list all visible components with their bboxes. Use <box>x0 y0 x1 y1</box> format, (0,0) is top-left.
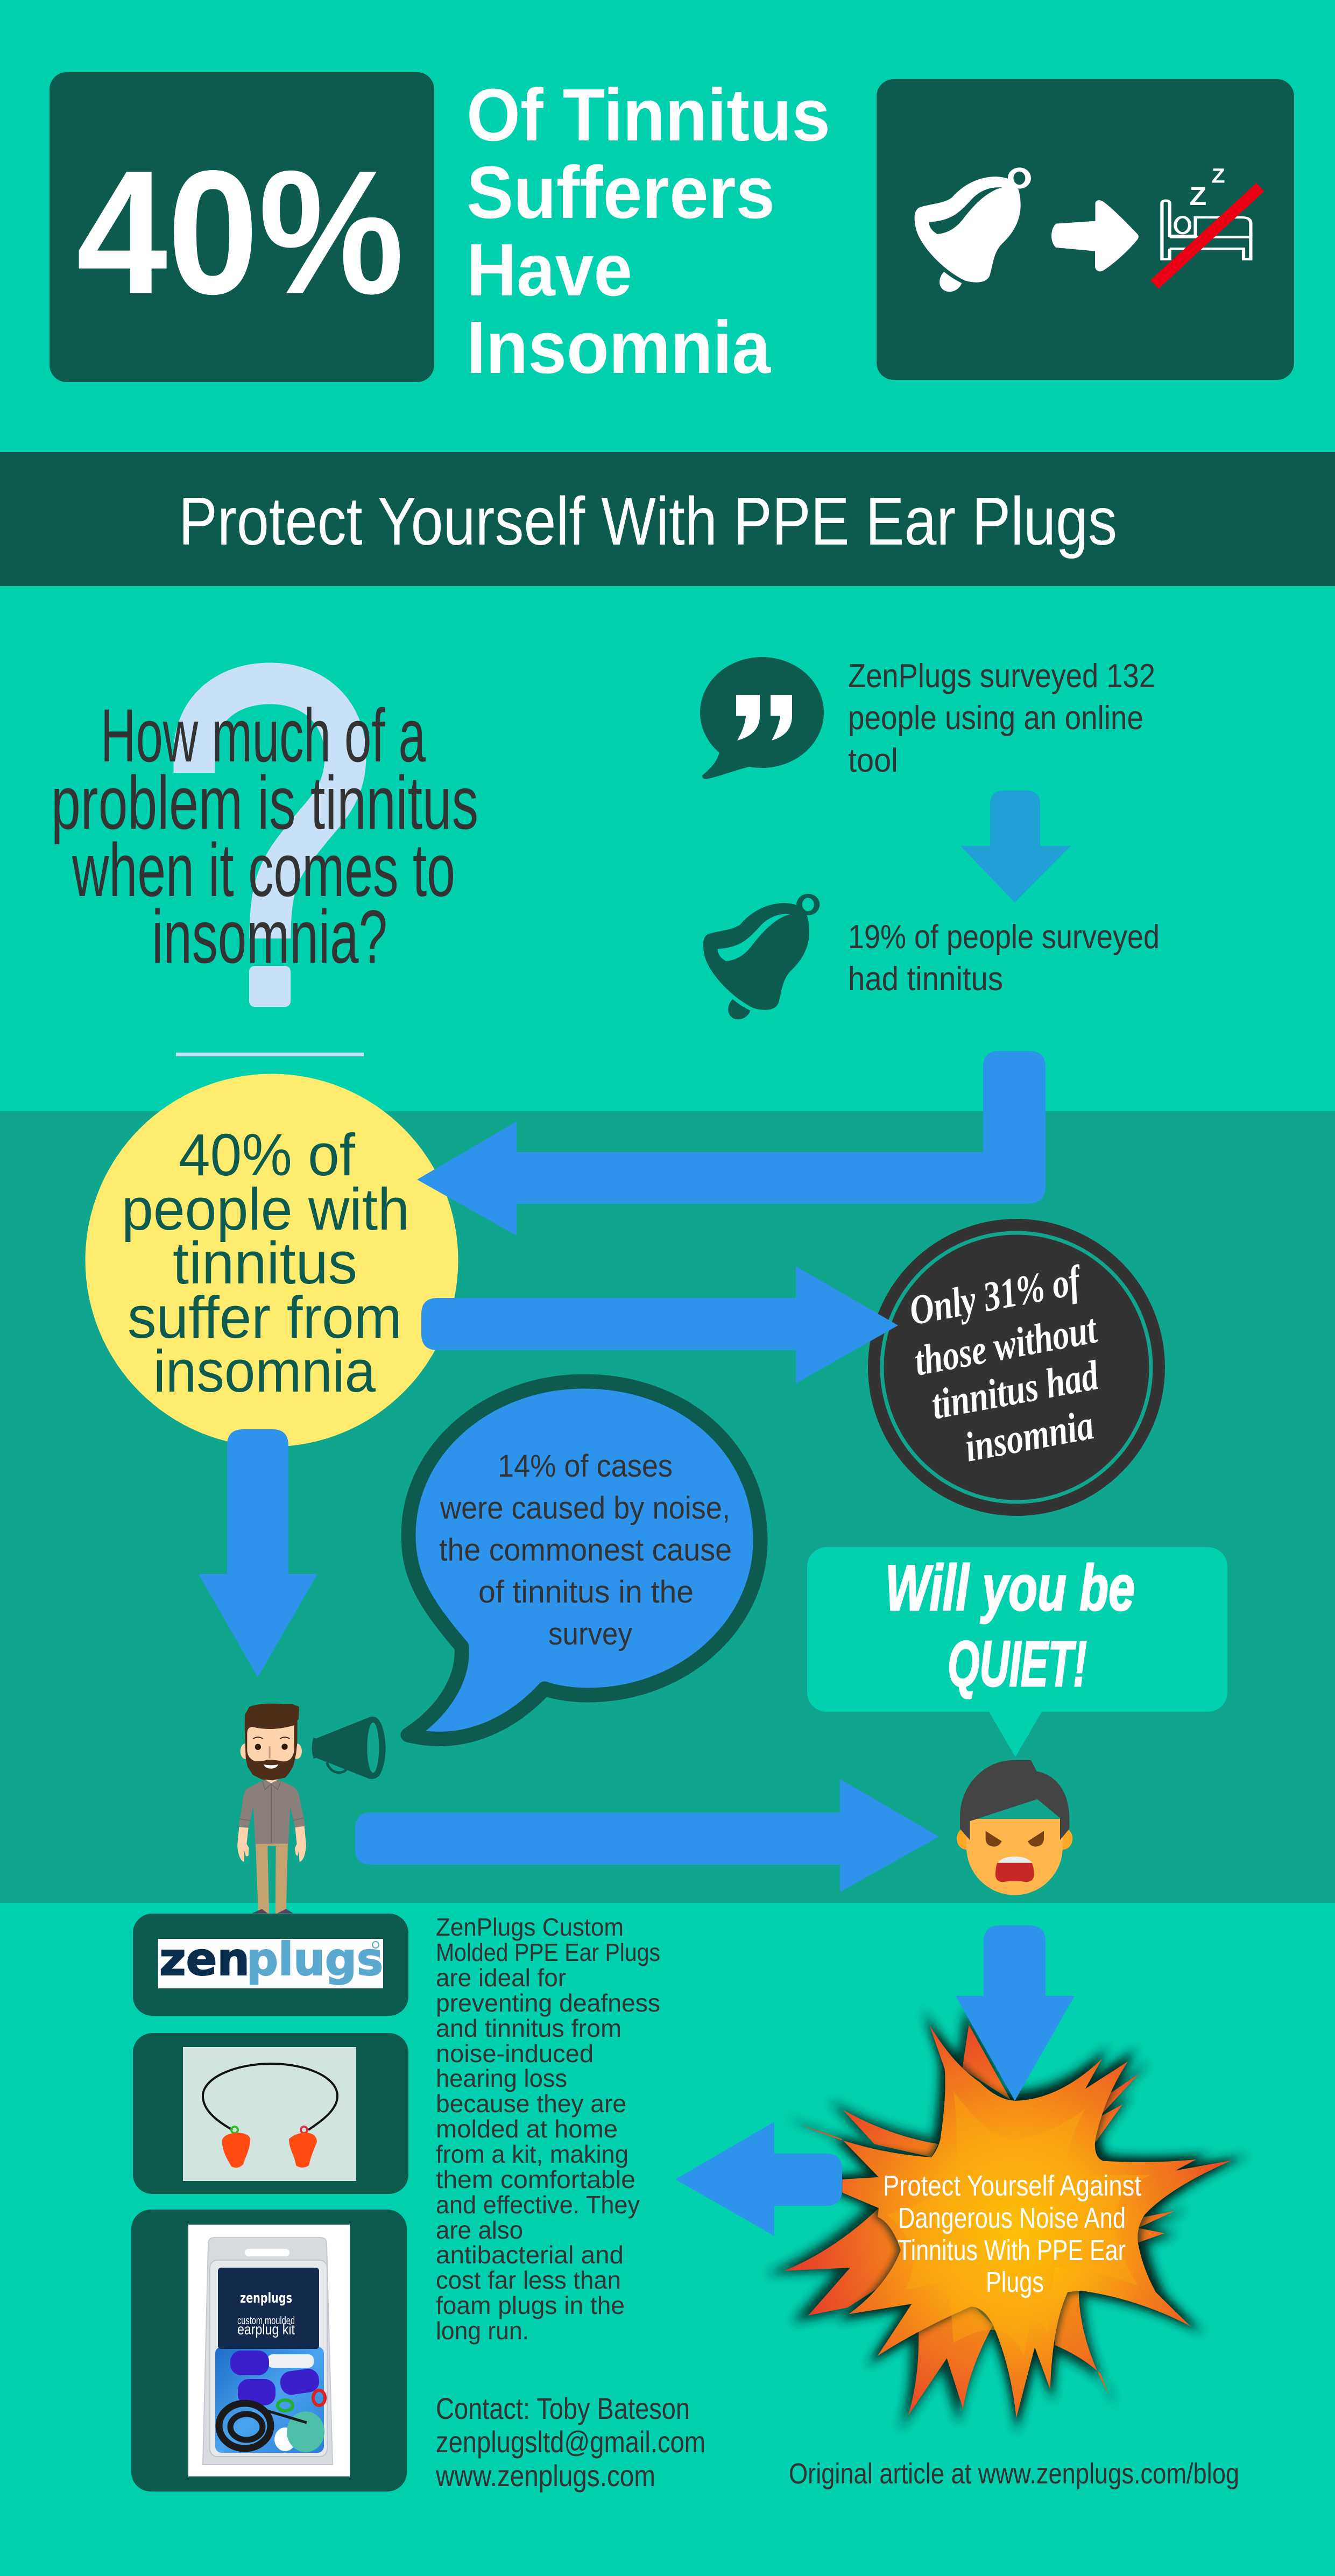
text: protect yourself against noise: Plugs <box>986 2266 1044 2298</box>
text: product description <box>436 1913 660 2345</box>
text: 19% had tinnitus <box>848 919 1160 998</box>
text: product description: hearing loss <box>436 2064 567 2092</box>
callout: yellow 40% circle: insomnia <box>153 1338 376 1405</box>
text: contact details: www.zenplugs.com <box>435 2459 655 2493</box>
arrow: man to angry neighbour <box>355 1779 939 1892</box>
icon: ringing bell <box>915 170 1028 292</box>
text: product description: them comfortable <box>436 2165 635 2193</box>
callout: noise speech bubble: survey <box>548 1617 632 1652</box>
panel: corded ear plugs photo <box>133 2033 408 2194</box>
panel: earplug kit photo: zenplugs <box>240 2290 292 2306</box>
heading: how much of a problem: problem is tinnitus <box>51 760 478 845</box>
callout: dark 31% circle: insomnia <box>961 1401 1097 1471</box>
callout: will you be quiet: QUIET! <box>948 1628 1087 1700</box>
title: of tinnitus sufferers have insomnia: Have <box>467 229 632 312</box>
arrow: yellow circle down to man <box>199 1429 317 1677</box>
arrow: survey down to result <box>960 791 1071 902</box>
panel: 40% statistic <box>50 72 434 382</box>
text: contact details: zenplugsltd@gmail.com <box>436 2425 705 2459</box>
text: 19% had tinnitus: had tinnitus <box>848 961 1003 998</box>
text: product description: foam plugs in the <box>436 2291 625 2319</box>
text: product description: are ideal for <box>436 1964 566 1992</box>
callout: noise speech bubble <box>408 1381 760 1739</box>
text: protect yourself against noise: Dangerous Noise And <box>898 2202 1126 2234</box>
panel: earplug kit photo: custom moulded <box>237 2315 295 2327</box>
text: zenplugs surveyed: ZenPlugs surveyed 132 <box>848 658 1155 695</box>
icon: dark bell <box>703 896 817 1019</box>
heading: how much of a problem <box>51 693 478 979</box>
illustration: bearded man <box>237 1704 306 1914</box>
callout: dark 31% circle: Only 31% of <box>906 1256 1086 1334</box>
icon: crossed out bed: Z <box>1212 165 1225 188</box>
divider line <box>176 1053 364 1056</box>
heading: how much of a problem: insomnia? <box>152 894 387 979</box>
callout: will you be quiet: Will you be <box>885 1552 1135 1624</box>
panel: zenplugs logo <box>133 1914 408 2016</box>
icon: megaphone <box>312 1717 386 1779</box>
heading: how much of a problem: How much of a <box>101 693 426 778</box>
text: product description: antibacterial and <box>436 2241 624 2269</box>
panel: earplug kit photo: earplug kit <box>237 2321 295 2338</box>
text: original article link: Original article at www.zenplugs.com/blog <box>789 2458 1239 2490</box>
text: zenplugs surveyed: tool <box>848 742 898 779</box>
callout: yellow 40% circle: people with <box>122 1176 409 1243</box>
text: protect yourself against noise: Protect Yourself Against <box>883 2170 1141 2202</box>
callout: yellow 40% circle <box>85 1074 458 1446</box>
callout: will you be quiet <box>807 1547 1227 1757</box>
text: product description: from a kit, making <box>436 2140 628 2168</box>
callout: yellow 40% circle: tinnitus <box>173 1230 357 1296</box>
text: product description: ZenPlugs Custom <box>436 1913 624 1941</box>
callout: noise speech bubble: were caused by noise, <box>440 1491 730 1526</box>
callout: noise speech bubble: 14% of cases <box>498 1449 673 1484</box>
text: product description: cost far less than <box>436 2266 621 2294</box>
heading: how much of a problem: when it comes to <box>72 828 455 912</box>
callout: yellow 40% circle: suffer from <box>128 1285 402 1351</box>
text: contact details: Contact: Toby Bateson <box>436 2391 690 2425</box>
callout: dark 31% circle: those without <box>910 1305 1101 1385</box>
text: product description: noise-induced <box>436 2039 594 2067</box>
banner: protect yourself: Protect Yourself With PPE Ear Plugs <box>179 483 1117 559</box>
arrow: yellow circle to dark circle <box>421 1266 898 1384</box>
callout: dark 31% circle: tinnitus had <box>928 1351 1103 1428</box>
icon: crossed out bed: Z <box>1190 181 1206 210</box>
middle band background <box>0 1111 1335 1903</box>
title: of tinnitus sufferers have insomnia: Insomnia <box>467 306 771 389</box>
callout: yellow 40% circle: 40% of <box>179 1122 355 1188</box>
icon: large question mark <box>194 683 345 1007</box>
text: zenplugs surveyed: people using an online <box>848 700 1143 737</box>
text: contact details <box>435 2391 705 2493</box>
text: product description: are also <box>436 2216 523 2244</box>
icon: white arrow <box>1051 200 1139 271</box>
text: 19% had tinnitus: 19% of people surveyed <box>848 919 1160 956</box>
text: protect yourself against noise: Tinnitus With PPE Ear <box>898 2234 1126 2267</box>
title: of tinnitus sufferers have insomnia: Sufferers <box>467 151 775 234</box>
callout: noise speech bubble: the commonest cause <box>439 1533 732 1568</box>
text: product description: long run. <box>436 2317 529 2345</box>
arrow: bent arrow into yellow circle <box>417 1051 1046 1236</box>
text: product description: Molded PPE Ear Plugs <box>436 1938 660 1966</box>
title: of tinnitus sufferers have insomnia: Of Tinnitus <box>467 74 830 157</box>
callout: dark 31% circle <box>868 1219 1165 1516</box>
panel: 40% statistic: 40% <box>76 133 404 331</box>
panel: zenplugs logo: plugs <box>246 1933 383 1986</box>
text: product description: molded at home <box>436 2115 618 2143</box>
text: product description: because they are <box>436 2090 626 2118</box>
illustration: angry face <box>957 1760 1072 1895</box>
icon: quote speech bubble <box>700 657 824 779</box>
banner: protect yourself <box>0 452 1335 586</box>
text: product description: preventing deafness <box>436 1989 660 2017</box>
icon: crossed out bed <box>1150 165 1264 289</box>
panel: earplug kit photo <box>131 2210 407 2492</box>
text: product description: and tinnitus from <box>436 2014 621 2042</box>
title: of tinnitus sufferers have insomnia <box>467 74 830 389</box>
arrow: angry neighbour down to explosion <box>956 1925 1075 2101</box>
text: zenplugs surveyed <box>848 658 1155 779</box>
illustration: explosion <box>766 2008 1249 2433</box>
arrow: explosion to product <box>675 2122 842 2236</box>
callout: noise speech bubble: of tinnitus in the <box>478 1575 694 1610</box>
panel: zenplugs logo: zen <box>159 1933 250 1986</box>
panel: bell leads to no sleep <box>877 79 1294 380</box>
text: product description: and effective. They <box>436 2191 640 2219</box>
text: protect yourself against noise <box>883 2170 1141 2298</box>
